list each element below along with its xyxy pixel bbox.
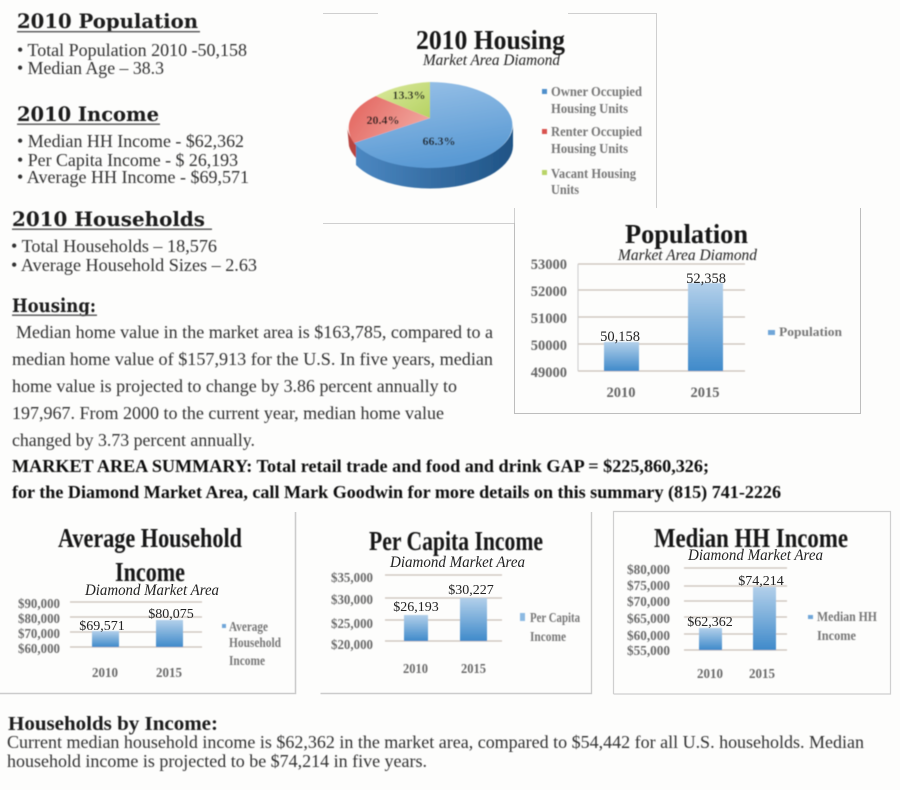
bars and axes: $25,000 [331, 617, 373, 632]
bars and axes: 2010 [697, 667, 723, 682]
legend [808, 609, 877, 643]
pie chart [347, 82, 513, 189]
bars and axes: 53000 [531, 257, 567, 273]
bars and axes: 2015 [690, 385, 720, 401]
bars and axes: 52000 [531, 284, 567, 300]
legend: Median HH [817, 609, 877, 624]
panel: Average Household Income bar chart: Income [115, 557, 185, 587]
bars and axes: $70,000 [18, 627, 60, 642]
bars and axes: $65,000 [627, 612, 670, 627]
bars and axes: $60,000 [18, 642, 60, 657]
bars and axes: $35,000 [331, 571, 373, 586]
legend: Average [229, 619, 268, 634]
bars and axes: $80,000 [18, 612, 60, 627]
data labels: $69,571 [79, 619, 125, 634]
section: 2010 Population: • Total Population 2010 -50,158 [17, 40, 247, 60]
legend: Income [530, 629, 566, 644]
bars and axes: $60,000 [627, 629, 670, 644]
panel: Average Household Income bar chart [0, 512, 296, 694]
section: 2010 Income: 2010 Income [17, 102, 159, 126]
bars and axes: 2010 [92, 666, 118, 681]
panel: Per Capita Income bar chart [320, 512, 592, 694]
section: housing narrative [12, 295, 493, 450]
legend: Income [817, 628, 856, 643]
pie chart: 20.4% [366, 113, 400, 127]
bars and axes: $30,000 [331, 593, 373, 608]
bars and axes: $55,000 [627, 644, 670, 659]
section: 2010 Income: • Median HH Income - $62,362 [17, 131, 244, 151]
pie legend: Housing Units [551, 141, 628, 156]
section: housing narrative: home value is projected to change by 3.86 percent annually to [12, 376, 457, 396]
bars and axes: 50000 [531, 338, 567, 354]
pie legend [542, 84, 642, 197]
legend: Population [779, 325, 842, 339]
section: 2010 Income: • Per Capita Income - $ 26,193 [17, 150, 238, 170]
bars and axes: $70,000 [627, 595, 670, 610]
legend: Per Capita [530, 610, 580, 625]
section: 2010 Households: • Average Household Sizes – 2.63 [11, 255, 257, 275]
section: housing narrative: Housing: [12, 295, 96, 317]
market area summary [12, 456, 781, 502]
bars and axes: 2015 [156, 666, 182, 681]
legend: Income [229, 653, 265, 668]
section: 2010 Income [17, 102, 249, 187]
panel: Median HH Income bar chart [614, 512, 890, 694]
section: 2010 Households: • Total Households – 18,576 [11, 236, 217, 256]
chart title: Median HH Income [654, 523, 848, 553]
panel: Median HH Income bar chart: $74,214 [738, 574, 784, 589]
section: 2010 Income: • Average HH Income - $69,571 [17, 167, 249, 187]
bars and axes: 51000 [531, 311, 567, 327]
panel: Population bar chart [514, 208, 860, 414]
pie legend: Units [551, 182, 579, 197]
chart title: Per Capita Income [369, 526, 543, 556]
pie legend: Renter Occupied [551, 124, 642, 139]
bars and axes: $80,000 [627, 563, 670, 578]
section: Households by Income: Current median household income is $62,362 in the market area, compared to $54,442 for all U.S. households. Median [7, 732, 864, 752]
bars and axes: 2010 [606, 385, 636, 401]
market area summary: for the Diamond Market Area, call Mark Goodwin for more details on this summary (815) 741-2226 [12, 482, 781, 502]
section: housing narrative: changed by 3.73 percent annually. [12, 430, 255, 450]
bars and axes: 2010 [403, 662, 428, 677]
bars and axes [18, 597, 202, 681]
section: 2010 Population [17, 9, 247, 78]
pie legend: Owner Occupied [551, 84, 642, 99]
chart subtitle: Market Area Diamond [422, 52, 560, 69]
section: Households by Income [7, 713, 864, 771]
section: 2010 Population: 2010 Population [17, 9, 198, 33]
bars and axes: $20,000 [331, 638, 373, 653]
bars and axes [627, 563, 787, 682]
chart subtitle: Diamond Market Area [389, 554, 525, 571]
bars and axes: 49000 [531, 365, 567, 381]
pie legend: Housing Units [551, 101, 628, 116]
chart title: Population [625, 219, 748, 249]
section: housing narrative: 197,967. From 2000 to the current year, median home value [12, 403, 444, 423]
section: 2010 Households: 2010 Households [12, 207, 205, 231]
chart subtitle: Diamond Market Area [84, 582, 219, 599]
section: housing narrative: Median home value in the market area is $163,785, compared to a [16, 322, 493, 342]
chart subtitle: Diamond Market Area [687, 547, 823, 564]
section: 2010 Population: • Median Age – 38.3 [17, 58, 164, 78]
pie chart: 66.3% [422, 134, 456, 148]
pie legend: Vacant Housing [551, 166, 636, 181]
panel: Population bar chart: 52,358 [686, 271, 726, 287]
chart title: Average Household [58, 523, 242, 553]
chart title: 2010 Housing [416, 25, 565, 55]
data labels: $62,362 [687, 615, 733, 630]
section: 2010 Households [11, 207, 257, 275]
section: housing narrative: median home value of $157,913 for the U.S. In five years, median [12, 349, 493, 369]
legend: Household [229, 635, 281, 650]
section: Households by Income: Households by Income: [8, 713, 218, 735]
data labels: $26,193 [393, 600, 439, 615]
section: Households by Income: household income is projected to be $74,214 in five years. [7, 751, 427, 771]
market area summary: MARKET AREA SUMMARY: Total retail trade and food and drink GAP = $225,860,326; [12, 456, 709, 476]
bars and axes [531, 257, 745, 401]
bars and axes: $90,000 [18, 597, 60, 612]
bars and axes: $75,000 [627, 579, 670, 594]
bars and axes [331, 571, 502, 677]
panel: 2010 Housing pie chart [323, 14, 656, 224]
bars and axes: 2015 [749, 667, 775, 682]
legend [222, 619, 281, 668]
pie chart: 13.3% [392, 88, 426, 102]
legend [520, 610, 580, 644]
bars and axes: 2015 [461, 662, 486, 677]
panel: Average Household Income bar chart: $80,075 [148, 607, 194, 622]
panel: Per Capita Income bar chart: $30,227 [448, 583, 494, 598]
data labels: 50,158 [600, 329, 640, 345]
chart subtitle: Market Area Diamond [617, 247, 757, 264]
